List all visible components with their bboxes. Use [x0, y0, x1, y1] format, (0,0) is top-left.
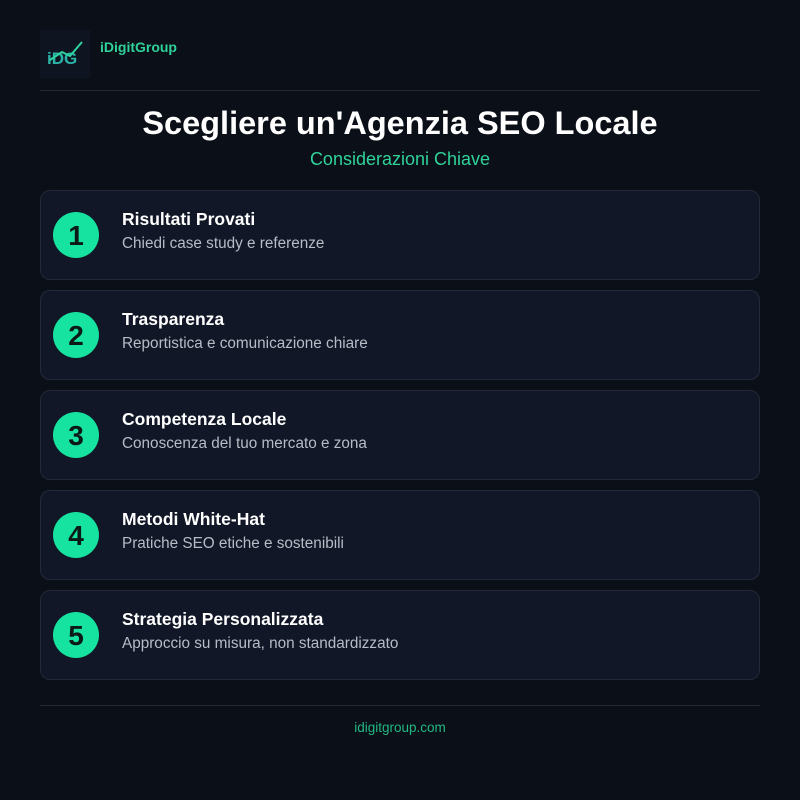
card 1: 1: [68, 220, 84, 251]
card 3: [40, 390, 760, 480]
card 3: Competenza Locale: [122, 409, 286, 429]
card 1: Chiedi case study e referenze: [122, 235, 324, 252]
card 5: Strategia Personalizzata: [122, 609, 323, 629]
logo: [40, 30, 90, 78]
title: Scegliere un'Agenzia SEO Locale: [142, 105, 658, 141]
brand name: iDigitGroup: [100, 39, 177, 55]
card 4: [40, 490, 760, 580]
card 2: Reportistica e comunicazione chiare: [122, 335, 368, 352]
card 3: 3: [68, 420, 84, 451]
card 5: 5: [68, 620, 84, 651]
subtitle: Considerazioni Chiave: [310, 149, 490, 169]
card 4: Metodi White-Hat: [122, 509, 265, 529]
card 5: Approccio su misura, non standardizzato: [122, 635, 398, 652]
card 2: Trasparenza: [122, 309, 224, 329]
card 4: Pratiche SEO etiche e sostenibili: [122, 535, 344, 552]
logo: iDG: [47, 49, 77, 68]
card 1: Risultati Provati: [122, 209, 255, 229]
card 1: [40, 190, 760, 280]
card 2: [40, 290, 760, 380]
card 4: 4: [68, 520, 84, 551]
footer: idigitgroup.com: [354, 720, 446, 735]
card 5: [40, 590, 760, 680]
card 2: 2: [68, 320, 84, 351]
card 3: Conoscenza del tuo mercato e zona: [122, 435, 367, 452]
